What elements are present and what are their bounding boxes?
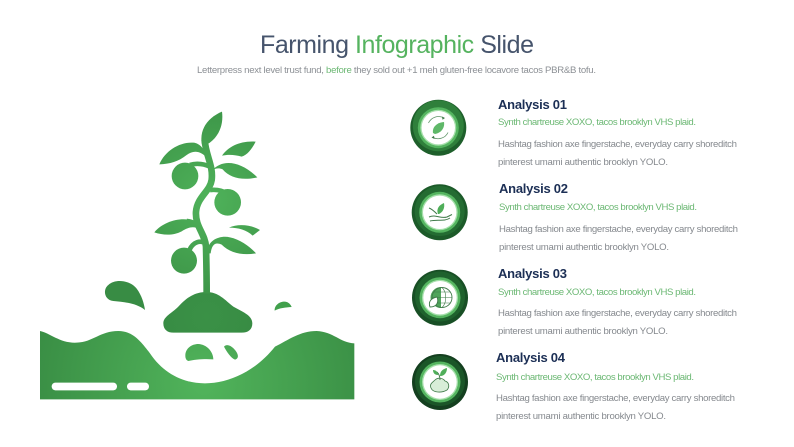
icon: sprout on soil xyxy=(430,368,449,392)
analysis 01 subheading: Synth chartreuse XOXO, tacos brooklyn VHS plaid. xyxy=(498,117,696,128)
falling soil drop left xyxy=(105,281,145,310)
ground bar long xyxy=(52,383,117,390)
icon: leaf cycle xyxy=(428,116,448,139)
soil chip center xyxy=(185,344,213,361)
analysis 02 body: pinterest umami authentic brooklyn YOLO. xyxy=(499,242,669,253)
item 4 xyxy=(412,350,735,422)
ground xyxy=(40,331,354,399)
badge 3 xyxy=(412,270,468,326)
analysis 04 body: pinterest umami authentic brooklyn YOLO. xyxy=(496,411,666,422)
item 2 xyxy=(412,181,738,253)
illustration: farming plant and soil xyxy=(40,112,354,399)
subtitle: Letterpress next level trust fund, before they sold out +1 meh gluten-free locavore tacos PBR&B tofu. xyxy=(197,65,596,76)
item 1 xyxy=(410,97,737,168)
ground bar short xyxy=(127,383,149,390)
badge 4 xyxy=(412,354,468,410)
icon: hand holding sprout xyxy=(429,203,452,221)
soil mound xyxy=(163,292,252,333)
analysis 04 subheading: Synth chartreuse XOXO, tacos brooklyn VHS plaid. xyxy=(496,372,694,383)
analysis 02 heading: Analysis 02 xyxy=(499,181,568,196)
analysis 03 heading: Analysis 03 xyxy=(498,266,567,281)
analysis 02 body: Hashtag fashion axe fingerstache, everyday carry shoreditch xyxy=(499,224,738,235)
soil chip small xyxy=(224,345,238,360)
item 3 xyxy=(412,266,737,337)
title: Farming Infographic Slide xyxy=(260,31,534,59)
analysis 02 subheading: Synth chartreuse XOXO, tacos brooklyn VHS plaid. xyxy=(499,202,697,213)
badge 2 xyxy=(412,184,468,240)
analysis 03 body: pinterest umami authentic brooklyn YOLO. xyxy=(498,326,668,337)
plant stem and leaves xyxy=(154,112,260,293)
analysis 04 body: Hashtag fashion axe fingerstache, everyday carry shoreditch xyxy=(496,393,735,404)
analysis 03 body: Hashtag fashion axe fingerstache, everyday carry shoreditch xyxy=(498,308,737,319)
analysis 03 subheading: Synth chartreuse XOXO, tacos brooklyn VHS plaid. xyxy=(498,287,696,298)
soil chip right xyxy=(275,302,292,311)
icon: globe and leaf xyxy=(429,287,452,308)
analysis 01 body: Hashtag fashion axe fingerstache, everyday carry shoreditch xyxy=(498,139,737,150)
analysis 01 body: pinterest umami authentic brooklyn YOLO. xyxy=(498,157,668,168)
badge 1 xyxy=(410,100,466,156)
analysis 04 heading: Analysis 04 xyxy=(496,350,566,365)
analysis 01 heading: Analysis 01 xyxy=(498,97,567,112)
